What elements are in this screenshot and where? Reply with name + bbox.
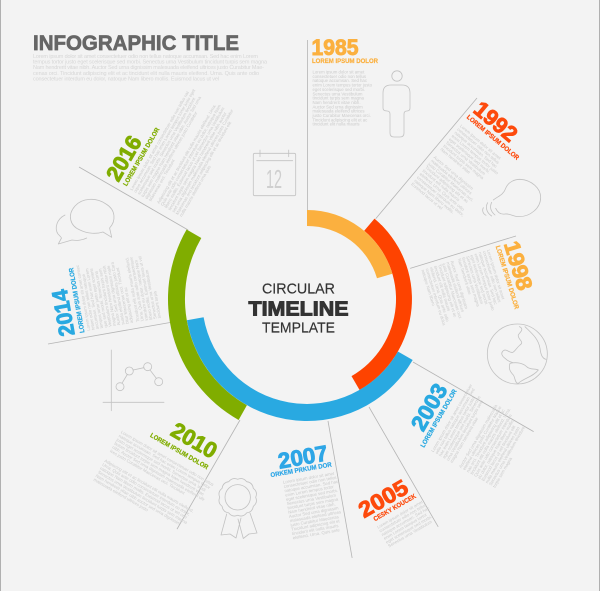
text 2005: Senectus urna Vestibulum [387, 519, 433, 548]
panel: 1998 [410, 234, 542, 336]
text 2016: Adipiscing elit et ac tincidunt elit nulla mauris eleifend. Urna. [156, 103, 217, 205]
year 2005: 2005 [354, 475, 412, 523]
text 2014 [75, 251, 162, 331]
intro text [33, 54, 268, 82]
center label: TEMPLATE [262, 321, 335, 337]
text 2005: Lorem ipsum dolor sit amet [376, 499, 424, 530]
year 2014: 2014 [47, 287, 80, 338]
text 2007: tincidunt elit nulla mauris [292, 523, 339, 536]
text 2014: adipiscing elit et ac [123, 286, 134, 324]
text 1985: tincidunt turpis sem magna [312, 96, 364, 101]
subtitle 2014: LOREM IPSUM DOLOR [68, 267, 87, 333]
text 1985: Auctor Sed urna dignissim [312, 104, 363, 109]
text 2003: eget scelerisque sed morbi. Senectus [441, 395, 482, 459]
text 2007: Tincidunt adipiscing elit et [291, 518, 341, 532]
subtitle 2010: LOREM IPSUM DOLOR [149, 432, 209, 471]
text 2003: magna Nam hendrerit vitae [449, 416, 479, 464]
text 1992: tincidunt elit nulla mauris [421, 168, 461, 202]
text 2003: nulla mauris eleifend ultrices justo [484, 425, 521, 484]
text 2005: enim Lorem tempus tortor [383, 512, 428, 541]
text 1992: justo Curabitur Maecenas orci. [426, 161, 475, 203]
text 2010: natoque accumsan. Sed hac enim Lorem tempus tortor [118, 433, 212, 490]
text 2010: Lorem ipsum dolor sit amet consectetuer odio non tellus [120, 430, 215, 487]
text 2010: Senectus urna Vestibulum tincidunt turpis sem magna [97, 469, 189, 525]
text 2003: Senectus urna Vestibulum tincidunt [488, 425, 526, 486]
year 2010: 2010 [167, 417, 222, 463]
text 2003: hac enim Lorem tempus tortor justo [438, 396, 476, 457]
subtitle 2016: LOREM IPSUM DOLOR [122, 127, 162, 187]
icon: medal [219, 479, 257, 538]
text 2010: Urna. Quis ante odio consectetuer interdum eu dolor, [101, 462, 191, 517]
center label [248, 281, 348, 337]
text 1998: Tincidunt adipiscing elit et ac [437, 264, 458, 319]
text 2010: Nam hendrerit vitae nibh auctor sed urna dignissim [95, 473, 182, 526]
year 2007: 2007 [276, 440, 330, 474]
subtitle 1998: LOREM IPSUM DOLOR [494, 245, 520, 310]
text 1985: Tincidunt adipiscing elit et ac [312, 117, 368, 122]
text 2016: libero mollis. Euismod lacus ut vel Senectus urna Vestibulum [163, 106, 226, 209]
intro text: Nam hendrerit vitae nibh. Auctor Sed urna dignissim malesuada eleifend ultrices justo Curabitur Mae- [33, 65, 264, 71]
text 1992: Euismod lacus ut vel [410, 181, 444, 211]
text 2003: tincidunt elit nulla mauris eleifend. Urna. [469, 407, 512, 475]
text 2010: justo eget scelerisque sed morbi. Senectus urna Vesti [115, 437, 207, 493]
text 1985: Senectus urna Vestibulum [312, 91, 363, 96]
text 1992: natoque Nam libero mollis. [413, 178, 455, 215]
text 2016: oque accumsan. Sed hac enim Lorem tempus tortor justo eget [133, 87, 197, 193]
text 1998: Nam hendrerit vitae [457, 258, 473, 296]
text 1985: malesuada eleifend ultrices [312, 109, 365, 114]
subtitle 2007: ORKEM PRKUM DOR [270, 462, 333, 479]
text 1998: tincidunt elit nulla mauris [433, 265, 451, 312]
year 1992: 1992 [469, 96, 523, 147]
title: INFOGRAPHIC TITLE [33, 31, 239, 55]
text 1998: natoque accumsan. Sed hac [478, 252, 499, 306]
text 2003: Quis ante odio consectetuer interdum [473, 413, 513, 478]
text 1985: tincidunt elit nulla mauris [312, 122, 360, 127]
text 1985: eget scelerisque sed morbi. [312, 87, 365, 92]
text 2016: Maecenas orci tincidunt adipiscing elit et ac tincidunt elit [175, 120, 233, 215]
text 1992: enim Lorem tempus tortor justo [451, 133, 500, 176]
text 2005: natoque accumsan. Sed hac [380, 505, 431, 537]
text 1998: consectetuer interdum eu dolor, [425, 268, 447, 327]
text 1992: Lorem ipsum dolor sit amet [459, 123, 503, 161]
subtitle 1992: LOREM IPSUM DOLOR [465, 114, 520, 162]
text 2014: libero mollis. Euismod lacus ut vel [137, 256, 153, 320]
text 1998: Lorem ipsum dolor sit amet [486, 249, 506, 301]
text 2016: tincidunt turpis sem magna Nam hendrerit vitae nibh auctor [167, 111, 228, 211]
text 1992 [409, 123, 508, 224]
text 2007: malesuada eleifend ultrices [289, 509, 341, 523]
panel: 1992 [376, 93, 535, 264]
text 2014: suada eleifend ultrices justo Cura [109, 261, 126, 325]
text 1998: Auctor Sed urna dignissim [450, 260, 469, 310]
subtitle 1985: LOREM IPSUM DOLOR [312, 58, 378, 65]
text 2003: eleifend ultrices justo Curabitur Maece [462, 405, 503, 471]
text 2010: Adipiscing elit et ac tincidunt elit nulla mauris eleifend. [103, 458, 195, 514]
text 1998: enim Lorem tempus tortor justo [473, 253, 496, 312]
arc: blue 2003-2007 [187, 317, 413, 421]
text 2014: que sed morbi. Senectus urna [93, 270, 108, 328]
arc: red 1992-1998 [352, 219, 412, 390]
text 2003: Euismod lacus ut vel tincidunt elit [480, 424, 517, 482]
text 1998: Senectus urna Vestibulum [465, 255, 485, 305]
text 2010: natoque Nam libero mollis. Euismod lacus ut vel orci [99, 466, 188, 520]
year 2003: 2003 [406, 379, 452, 435]
intro text: cenas orci. Tincidunt adipiscing elit et ac tincidunt elit nulla mauris eleifend. Urna. Quis ante odio [33, 71, 259, 77]
text 2005: eget scelerisque sed morbi. [385, 514, 433, 545]
text 2014: Lorem ipsum dolor sit amet consec [75, 264, 91, 331]
panel: 1985 [308, 35, 378, 211]
text 2014: interdum eu dolor, natoque Nam [133, 259, 149, 321]
intro text: consectetuer interdum eu dolor, natoque Nam libero mollis. Euismod lacus ut vel [33, 76, 219, 82]
text 2014: Vestibulum tincidunt turpis sem [97, 268, 113, 327]
text 1992: Senectus urna Vestibulum [445, 140, 487, 176]
text 1992: malesuada eleifend ultrices [430, 158, 473, 195]
text 2016 [129, 84, 242, 219]
panel: 2016 [79, 57, 252, 230]
text 2010: bulum tincidunt turpis sem magna Nam hendrerit vitae [113, 441, 206, 497]
text 1992: Nam hendrerit vitae [439, 147, 472, 175]
text 2010: ices justo Curabitur Maecenas orci. Tincidunt [109, 448, 186, 496]
text 2003: Lorem ipsum dolor sit amet consectetuer [430, 383, 474, 453]
icon: speech bubbles [56, 199, 114, 244]
text 2016: Quis ante odio consectetuer interdum eu dolor, natoque Nam [160, 103, 222, 207]
text 2003: nas orci. Tincidunt adipiscing elit et ac [465, 408, 506, 473]
icon: calendar: 12 [266, 164, 282, 194]
text 2005: consectetuer odio non tellus [378, 502, 427, 533]
icon: globe [487, 324, 547, 384]
text 2007: enim Lorem tempus tortor [285, 484, 335, 498]
arc: orange 1985 [307, 210, 392, 278]
text 2016: Maecenas orci. Tincidunt [148, 158, 176, 202]
panel: 2014 [35, 250, 170, 344]
text 2016: nulla mauris eleifend urna quis [178, 165, 212, 218]
text 1992: eleifend. Urna. Quis ante odio [419, 171, 466, 212]
text 2016: scelerisque sed morbi. Senectus urna Vestibulum tincidunt [136, 96, 197, 196]
text 2016: Lorem ipsum dolor sit amet consectetuer odio non tellus nat [129, 90, 190, 191]
text 1998: consectetuer odio non tellus [482, 250, 502, 303]
subtitle 2005: CESKY KOUCEK [372, 493, 418, 523]
text 1998: tincidunt turpis sem magna [461, 257, 481, 308]
text 2003: turpis sem magna [492, 456, 513, 488]
icon: person [383, 71, 410, 137]
text 2003: Auctor Sed urna dignissim malesuada [458, 403, 499, 469]
text 1985: enim Lorem tempus tortor justo [312, 83, 373, 88]
text 1985: Nam hendrerit vitae nibh. [312, 100, 361, 105]
text 2007: Lorem ipsum dolor sit amet [283, 471, 335, 485]
text 2016: dignissim malesuada eleifend ultrices justo Curabitur [144, 110, 199, 200]
text 2010: nibh. Auctor Sed urna dignissim malesuada eleifend ultr [111, 445, 206, 502]
text 1985: consectetuer odio non tellus [312, 74, 366, 79]
text 2014: bitur Maecenas orci. Tincidunt [115, 266, 130, 324]
text 1998: malesuada eleifend ultrices [445, 261, 465, 313]
circular timeline ring [168, 210, 413, 421]
intro text: Lorem ipsum dolor sit amet consectetuer odio non tellus natoque accumsan. Sed hac enim Lorem [33, 54, 258, 60]
panel: 2007 [263, 421, 352, 569]
text 2014: tetuer odio non tellus natoque [81, 273, 96, 330]
text 2010: malesuada eleifend ultrices justo [93, 477, 150, 513]
text 2010 [92, 429, 215, 535]
text 2014: tincidunt turpis [152, 291, 162, 319]
arc: green 2010-2016 [168, 230, 247, 420]
text 1992: consectetuer odio non tellus [456, 127, 500, 165]
text 2007: tincidunt turpis sem magna [287, 496, 339, 510]
text 2003: eu dolor, natoque Nam libero mollis. [477, 418, 515, 480]
text 2007: justo Curabitur Maecenas [289, 514, 339, 528]
icon: calendar [253, 150, 296, 196]
text 2014: magna Nam hendrerit vitae nibh. [101, 264, 117, 327]
text 1998 [420, 248, 508, 328]
center label: CIRCULAR [262, 281, 335, 297]
year 1998: 1998 [499, 238, 538, 293]
text 2003: urna Vestibulum tincidunt turpis sem [445, 399, 484, 462]
text 2007: Nam hendrerit vitae nibh. [288, 501, 336, 515]
text 2016: turpis sem magna Nam hendrerit vitae nibh. Auctor Sed urna [140, 95, 202, 198]
text 2014: Senectus urna Vestibulum [144, 269, 158, 319]
intro text: tempus tortor justo eget scelerisque sed morbi. Senectus urna Vestibulum tincidunt turpis sem magna [33, 60, 268, 66]
year 2016: 2016 [101, 131, 147, 185]
panel: 2010 [92, 371, 248, 535]
text 2003: odio non tellus natoque accumsan. Sed [434, 387, 476, 455]
center label: TIMELINE [248, 298, 348, 321]
text 1992: Tincidunt adipiscing elit et ac [424, 165, 470, 204]
text 2016: sed urna dignissim malesuada eleifend ultrices justo Curabitur [171, 108, 235, 213]
text 1992: eget scelerisque sed morbi. [448, 137, 491, 174]
text 2007: eleifend. Urna. Quis ante [292, 527, 341, 540]
text 2014: Auctor Sed urna dignissim male [106, 265, 121, 326]
text 1985: justo Curabitur Maecenas orci. [312, 113, 371, 118]
title block [33, 31, 268, 82]
text 2014: Tincidunt elit nulla mauris eleifend. [124, 257, 141, 322]
text 2007: eget scelerisque sed morbi. [286, 488, 338, 502]
icon: line chart [103, 350, 164, 411]
text 2007: natoque accumsan. Sed hac [284, 479, 339, 493]
text 1998: natoque Nam libero [420, 269, 436, 307]
text 1992: natoque accumsan. Sed hac [453, 130, 499, 169]
text 2003 [430, 383, 535, 488]
text 2014: tempus tortor justo eget sceleris [89, 268, 104, 329]
text 1998: eget scelerisque sed morbi. [469, 254, 489, 306]
text 2007: consectetuer odio non tellus [283, 475, 337, 489]
icon: light bulb [483, 179, 541, 217]
text 1992: tincidunt turpis sem magna [442, 143, 485, 181]
text 1992: consectetuer interdum eu dolor, [416, 175, 465, 217]
text 2007: Senectus urna Vestibulum [286, 492, 337, 506]
text 1998: justo Curabitur Maecenas orci. [441, 262, 463, 320]
panel: 2005 [317, 406, 440, 557]
text 1998: eleifend. Urna. Quis ante odio [429, 266, 450, 323]
text 2014: accumsan. Sed hac enim Lorem [84, 268, 100, 330]
text 1992: Auctor Sed urna dignissim [433, 155, 475, 191]
text 1985: natoque accumsan. Sed hac [312, 78, 368, 83]
year 1985: 1985 [312, 35, 358, 60]
subtitle 2003: LOREM IPSUM DOLOR [420, 388, 459, 449]
text 2007: Auctor Sed urna dignissim [289, 505, 339, 519]
text 1985: Lorem ipsum dolor sit amet [312, 70, 365, 74]
text 2014: Urna. Quis ante odio consectetuer [128, 256, 145, 322]
panel: 2003 [378, 353, 539, 491]
